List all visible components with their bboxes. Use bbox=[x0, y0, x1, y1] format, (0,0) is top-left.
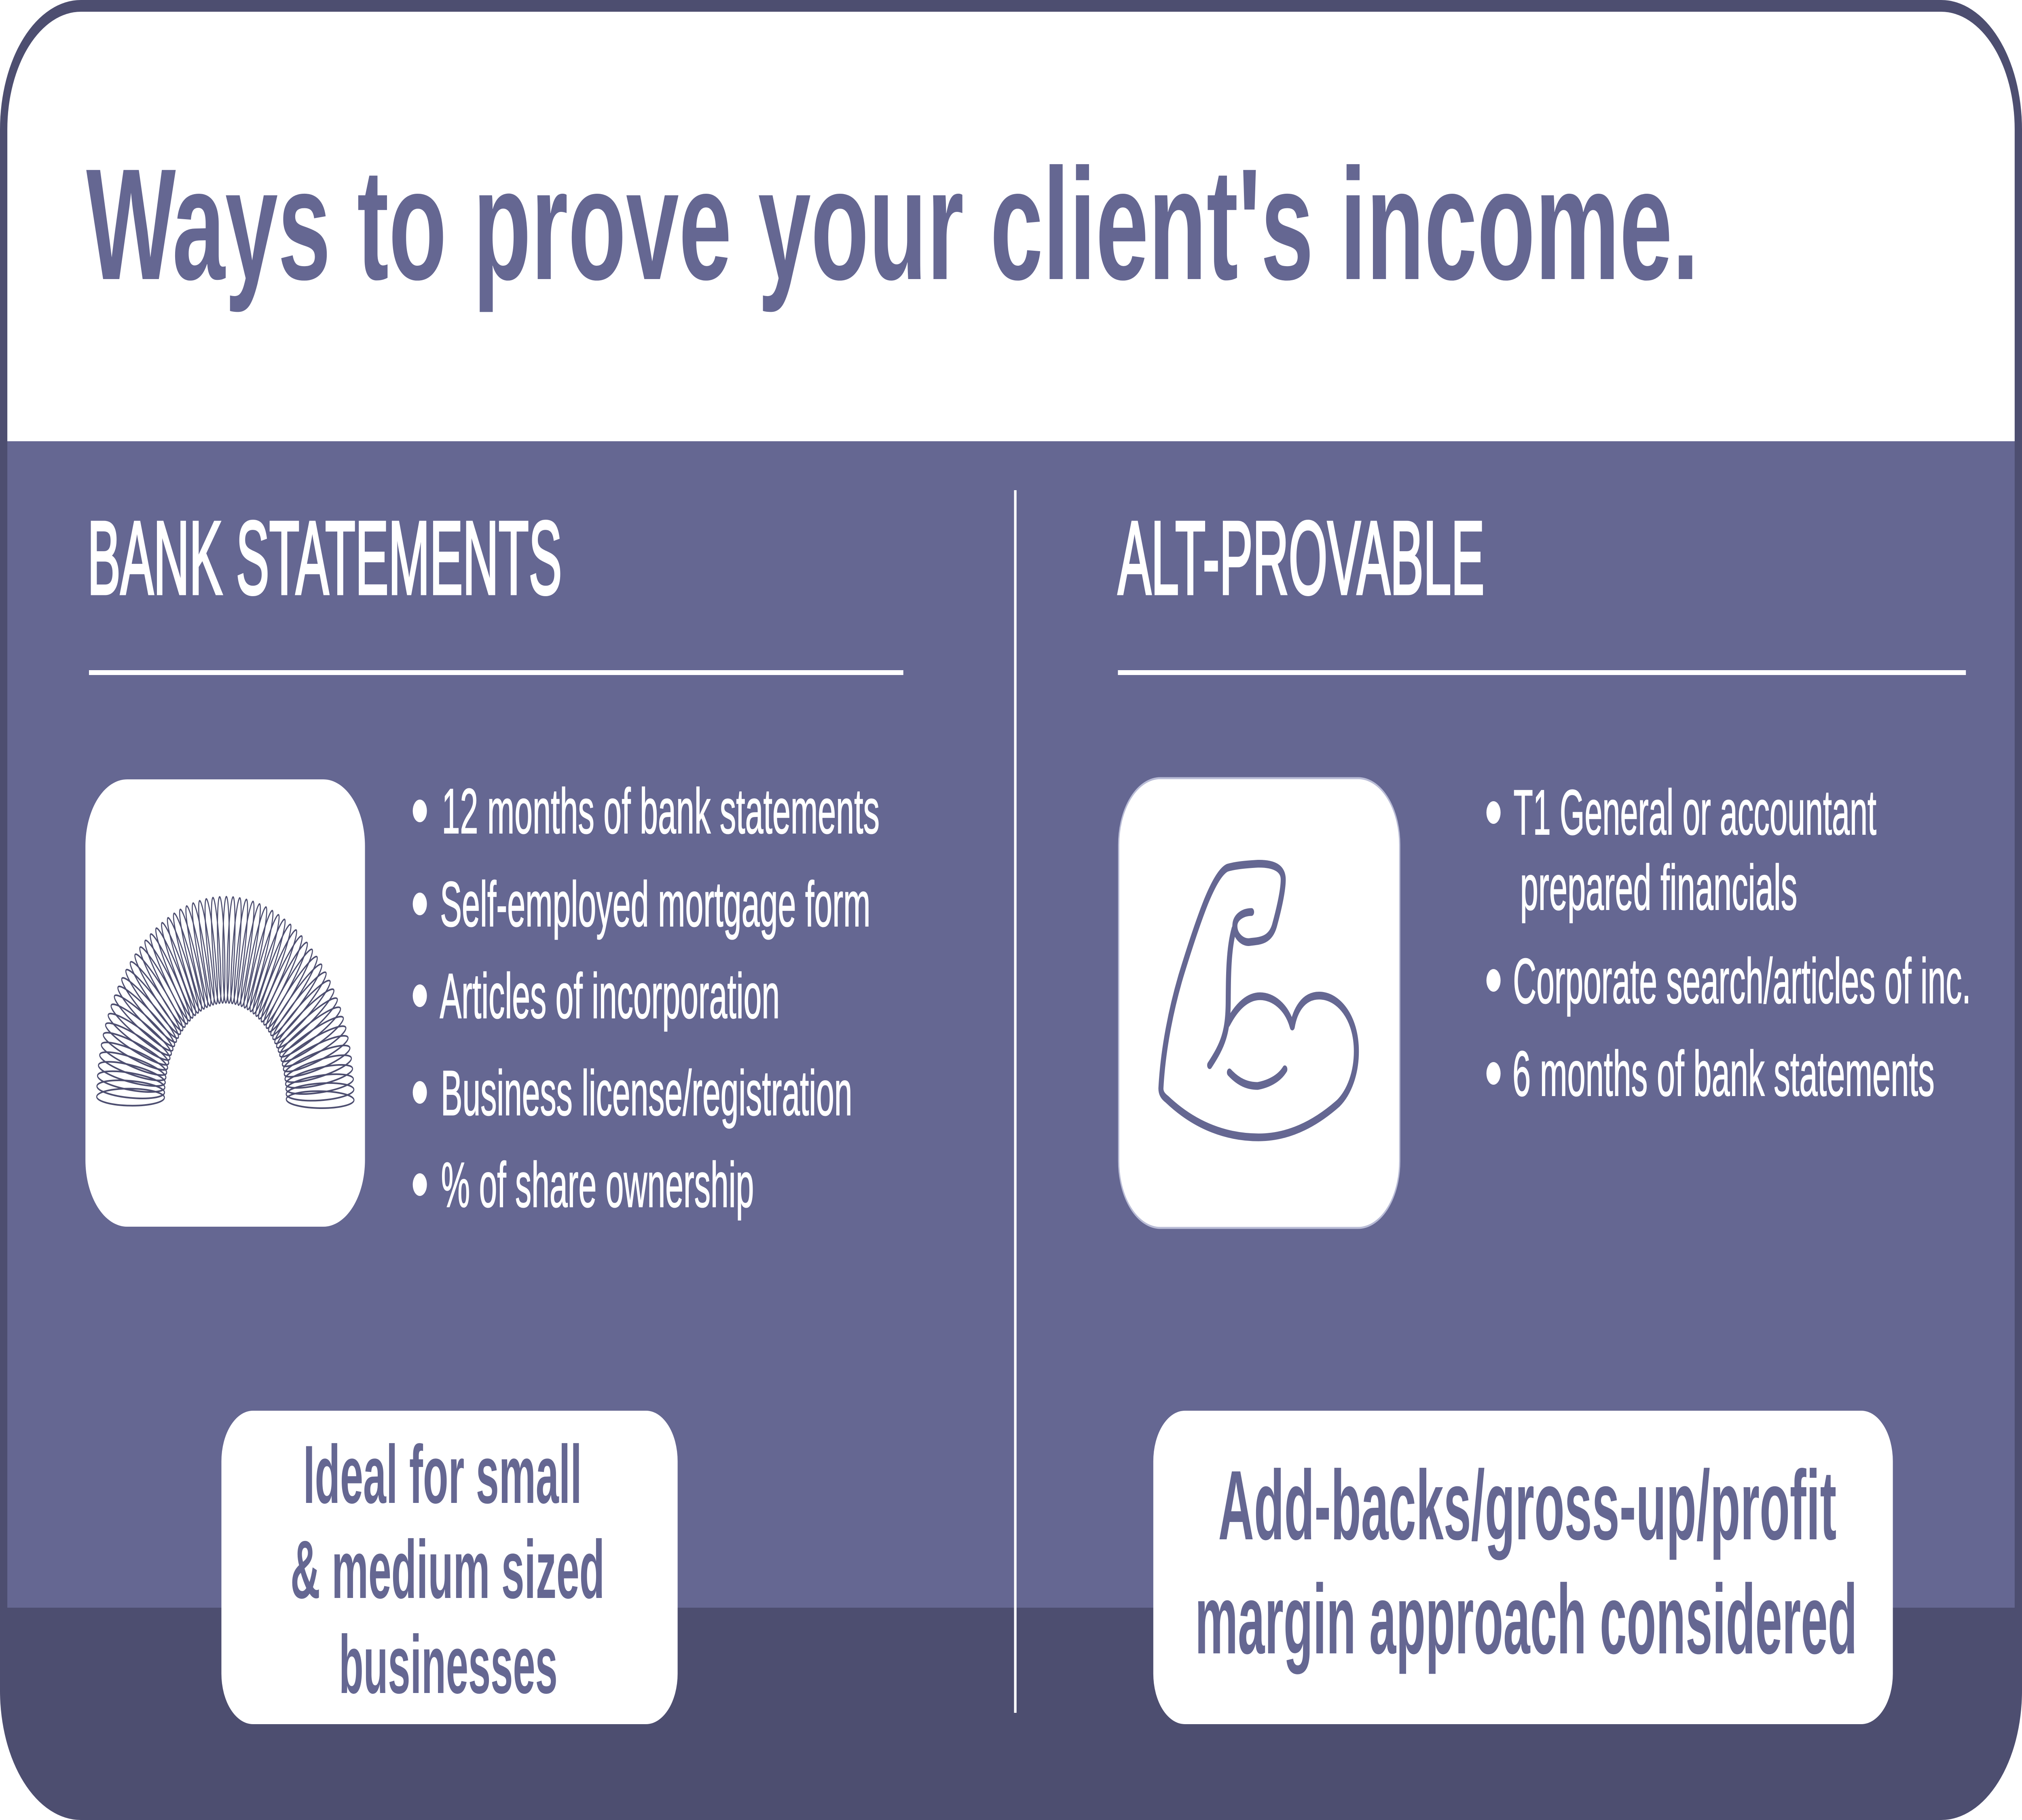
callout: ideal businesses: businesses bbox=[339, 1619, 558, 1711]
bullet list: alt-provable: T1 General or accountant bbox=[1513, 777, 1876, 848]
bullet list: bank statements: Self-employed mortgage form bbox=[440, 868, 870, 940]
bullet list: alt-provable bbox=[1487, 777, 1971, 1109]
callout: add-backs: margin approach considered bbox=[1195, 1565, 1857, 1675]
heading: alt-provable: ALT-PROVABLE bbox=[1118, 500, 1485, 616]
bullet list: bank statements: Business license/registration bbox=[441, 1057, 852, 1129]
callout: ideal businesses: & medium sized bbox=[290, 1524, 605, 1616]
main panel bbox=[7, 441, 2015, 1608]
panel: alt-provable bbox=[1118, 500, 1971, 1724]
bullet list: bank statements: % of share ownership bbox=[441, 1149, 754, 1221]
callout: ideal businesses bbox=[222, 1411, 678, 1724]
callout: ideal businesses: Ideal for small bbox=[303, 1429, 582, 1521]
panel: bank statements bbox=[85, 500, 903, 1724]
bullet list: bank statements: Articles of incorporation bbox=[440, 960, 780, 1032]
bullet list: bank statements: 12 months of bank statements bbox=[442, 775, 880, 847]
icon: slinky bbox=[85, 779, 365, 1227]
callout: add-backs: Add-backs/gross-up/profit bbox=[1218, 1451, 1836, 1561]
heading: bank statements: BANK STATEMENTS bbox=[87, 500, 562, 616]
heading rule bbox=[89, 670, 903, 675]
heading rule bbox=[1118, 670, 1966, 675]
icon: flexed arm bbox=[1119, 778, 1400, 1228]
header panel bbox=[7, 12, 2015, 441]
bullet list: alt-provable: 6 months of bank statements bbox=[1512, 1038, 1935, 1109]
divider bbox=[1014, 490, 1017, 1713]
bullet list: bank statements bbox=[413, 775, 880, 1221]
bullet list: alt-provable: prepared financials bbox=[1520, 852, 1797, 923]
title: Ways to prove your client's income. bbox=[86, 136, 1699, 314]
callout: add-backs bbox=[1153, 1411, 1893, 1724]
